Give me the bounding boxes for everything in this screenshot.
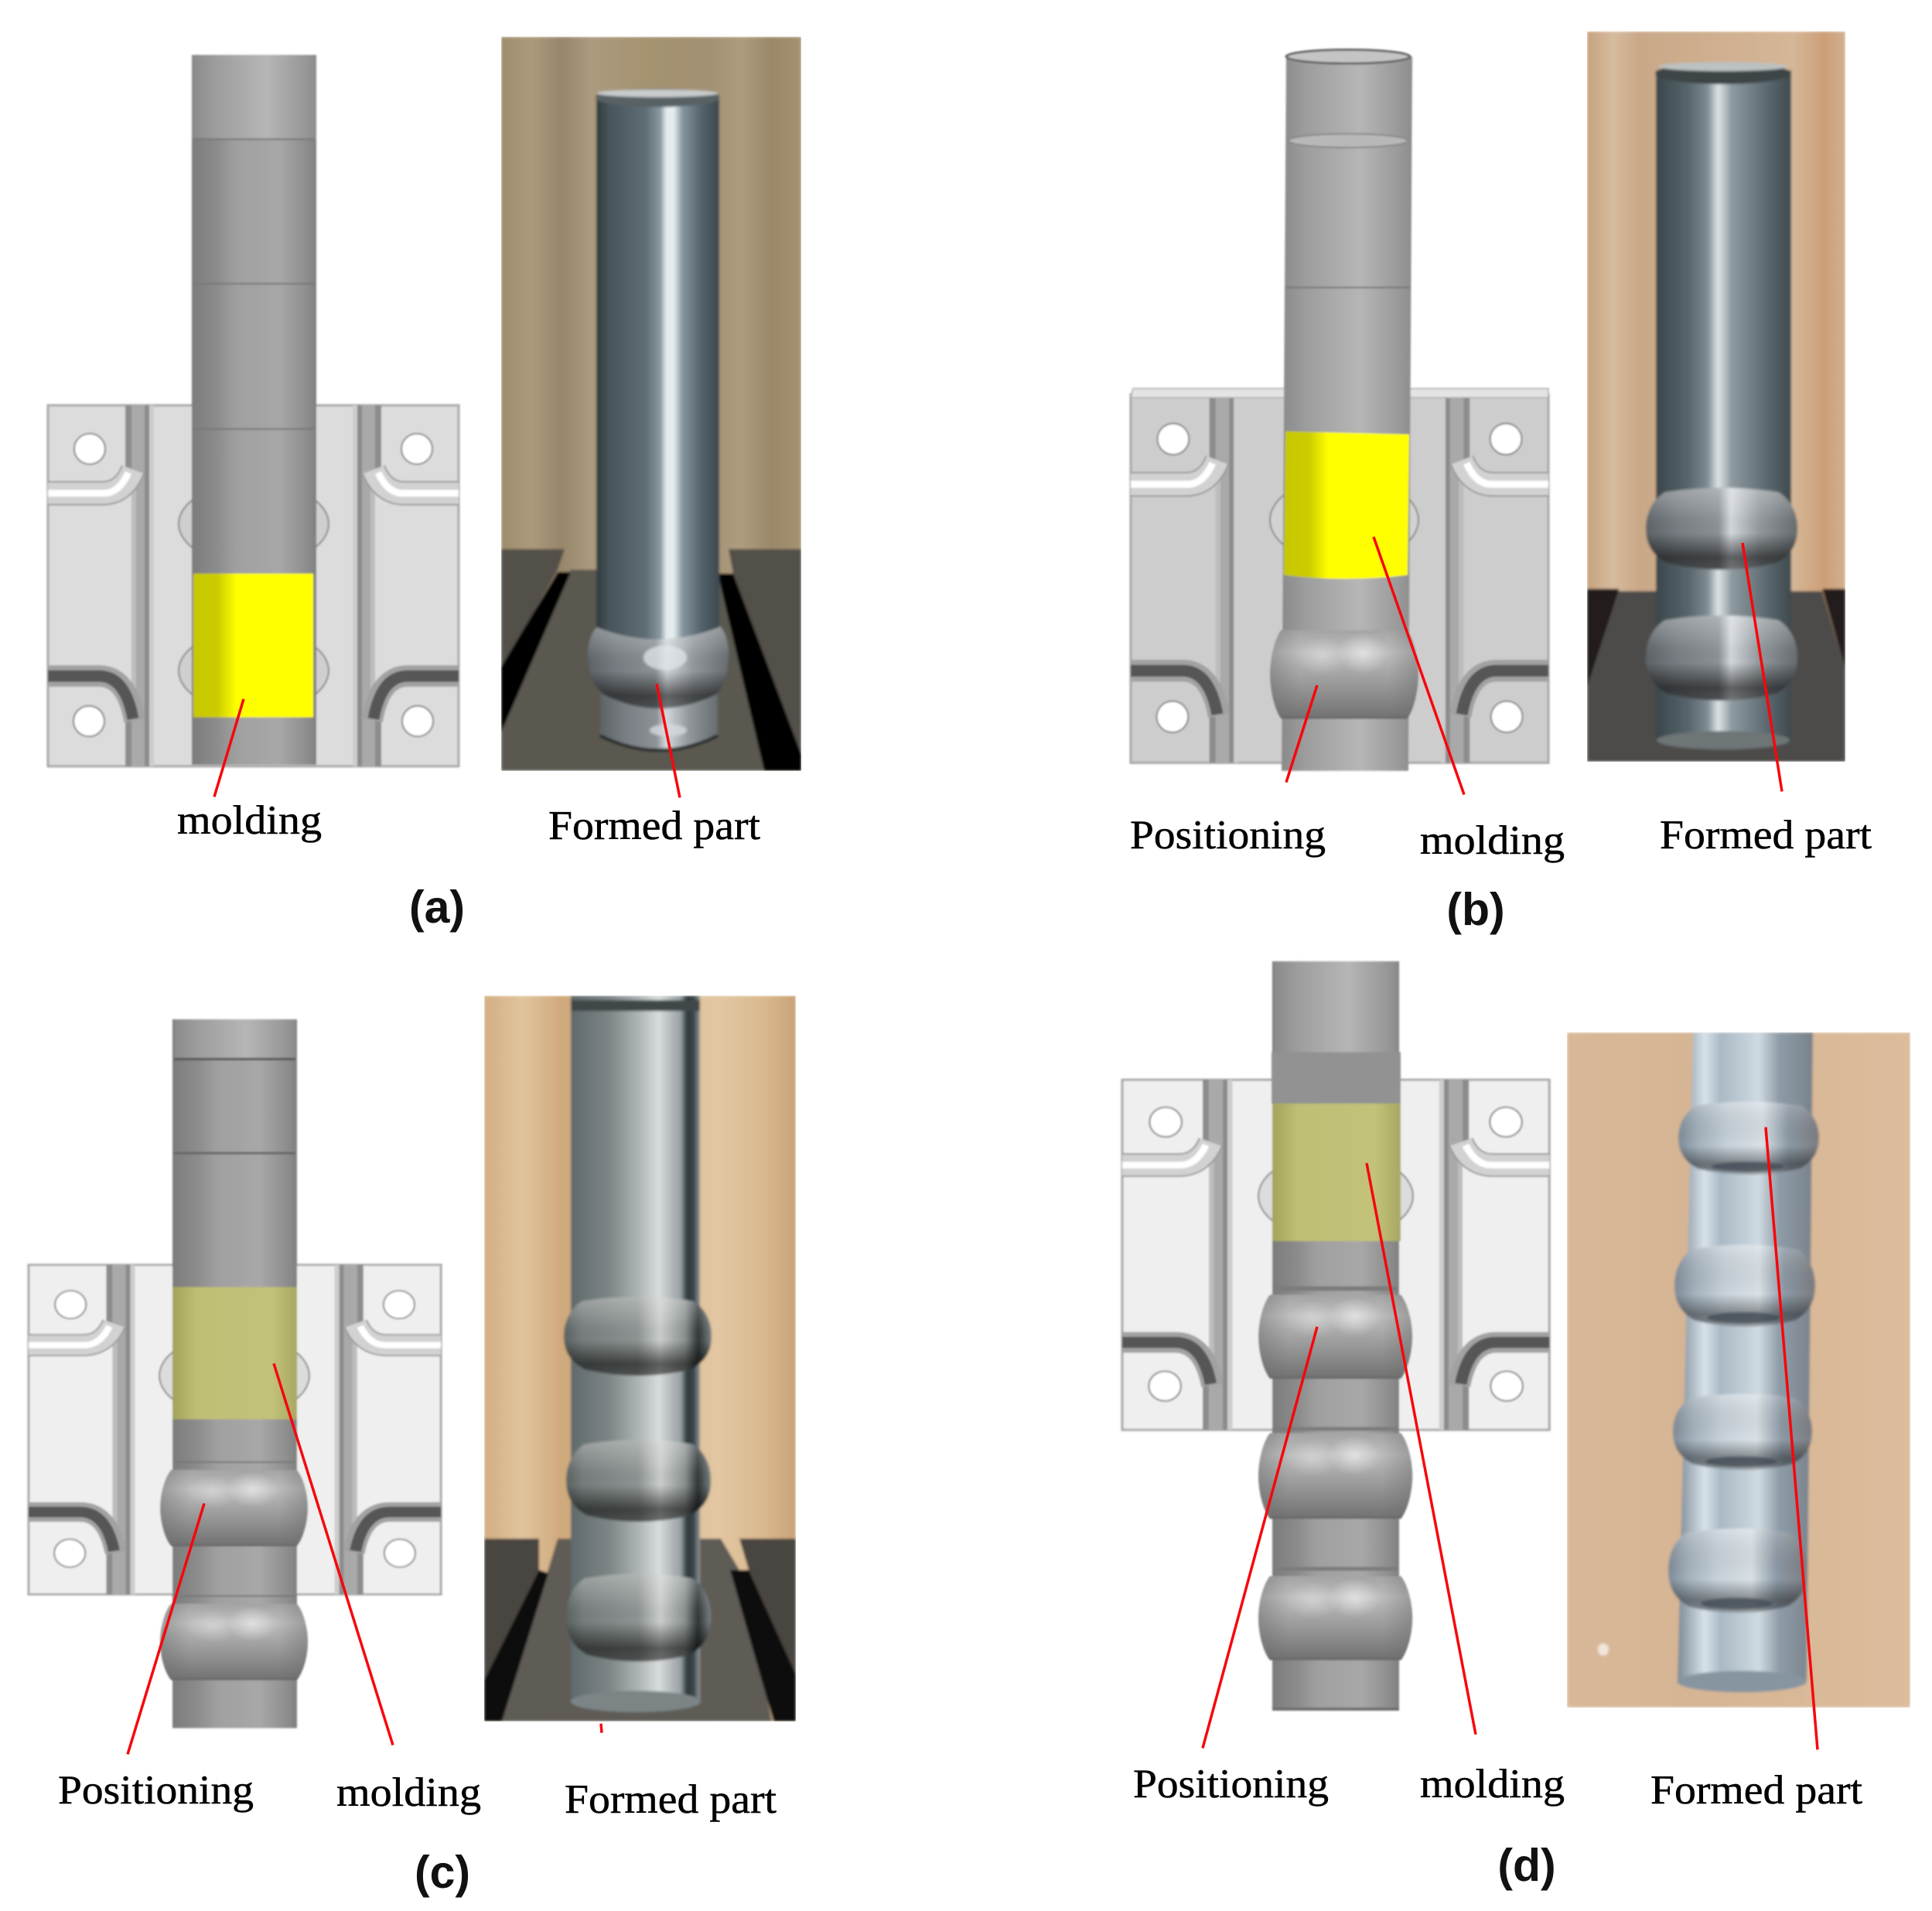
caption c: (c) <box>415 1847 470 1898</box>
label: positioning d: Positioning <box>1133 1762 1329 1807</box>
panel c <box>29 995 796 1898</box>
callout stub c: formed part <box>601 1724 602 1733</box>
label: formed part d: Formed part <box>1650 1768 1862 1813</box>
caption a: (a) <box>409 882 465 933</box>
callout line b: formed part <box>1743 543 1782 791</box>
panel d <box>1122 961 1910 1891</box>
callout line c: positioning <box>128 1503 204 1754</box>
label: molding a: molding <box>177 798 322 843</box>
label: molding b: molding <box>1420 818 1565 863</box>
label: formed part b: Formed part <box>1660 813 1872 858</box>
label: molding c: molding <box>336 1770 481 1815</box>
callout line d: positioning <box>1203 1327 1317 1748</box>
photo d: formed part <box>1567 1032 1910 1708</box>
callout line a: molding <box>214 699 244 797</box>
label: formed part c: Formed part <box>565 1777 777 1822</box>
photo a: formed part <box>501 36 801 771</box>
CAD model b: die and tube <box>1131 49 1548 771</box>
caption d: (d) <box>1497 1840 1556 1891</box>
label: molding d: molding <box>1420 1762 1565 1807</box>
label: positioning b: Positioning <box>1130 813 1326 858</box>
photo b: formed part <box>1587 32 1845 762</box>
CAD model d: die and tube <box>1122 961 1549 1711</box>
caption b: (b) <box>1446 884 1505 935</box>
label: positioning c: Positioning <box>58 1768 254 1813</box>
photo c: formed part <box>484 995 796 1722</box>
CAD model a: die and tube <box>48 55 459 766</box>
callout line b: positioning <box>1286 685 1317 783</box>
label: formed part a: Formed part <box>548 804 760 848</box>
callout line c: molding <box>274 1363 393 1745</box>
callout line d: molding <box>1367 1163 1476 1735</box>
callout line d: formed part <box>1766 1127 1818 1749</box>
callout line a: formed part <box>657 684 680 797</box>
CAD model c: die and tube <box>29 1019 441 1728</box>
panel a <box>48 36 801 933</box>
panel b <box>1130 32 1872 935</box>
callout line b: molding <box>1374 537 1464 794</box>
